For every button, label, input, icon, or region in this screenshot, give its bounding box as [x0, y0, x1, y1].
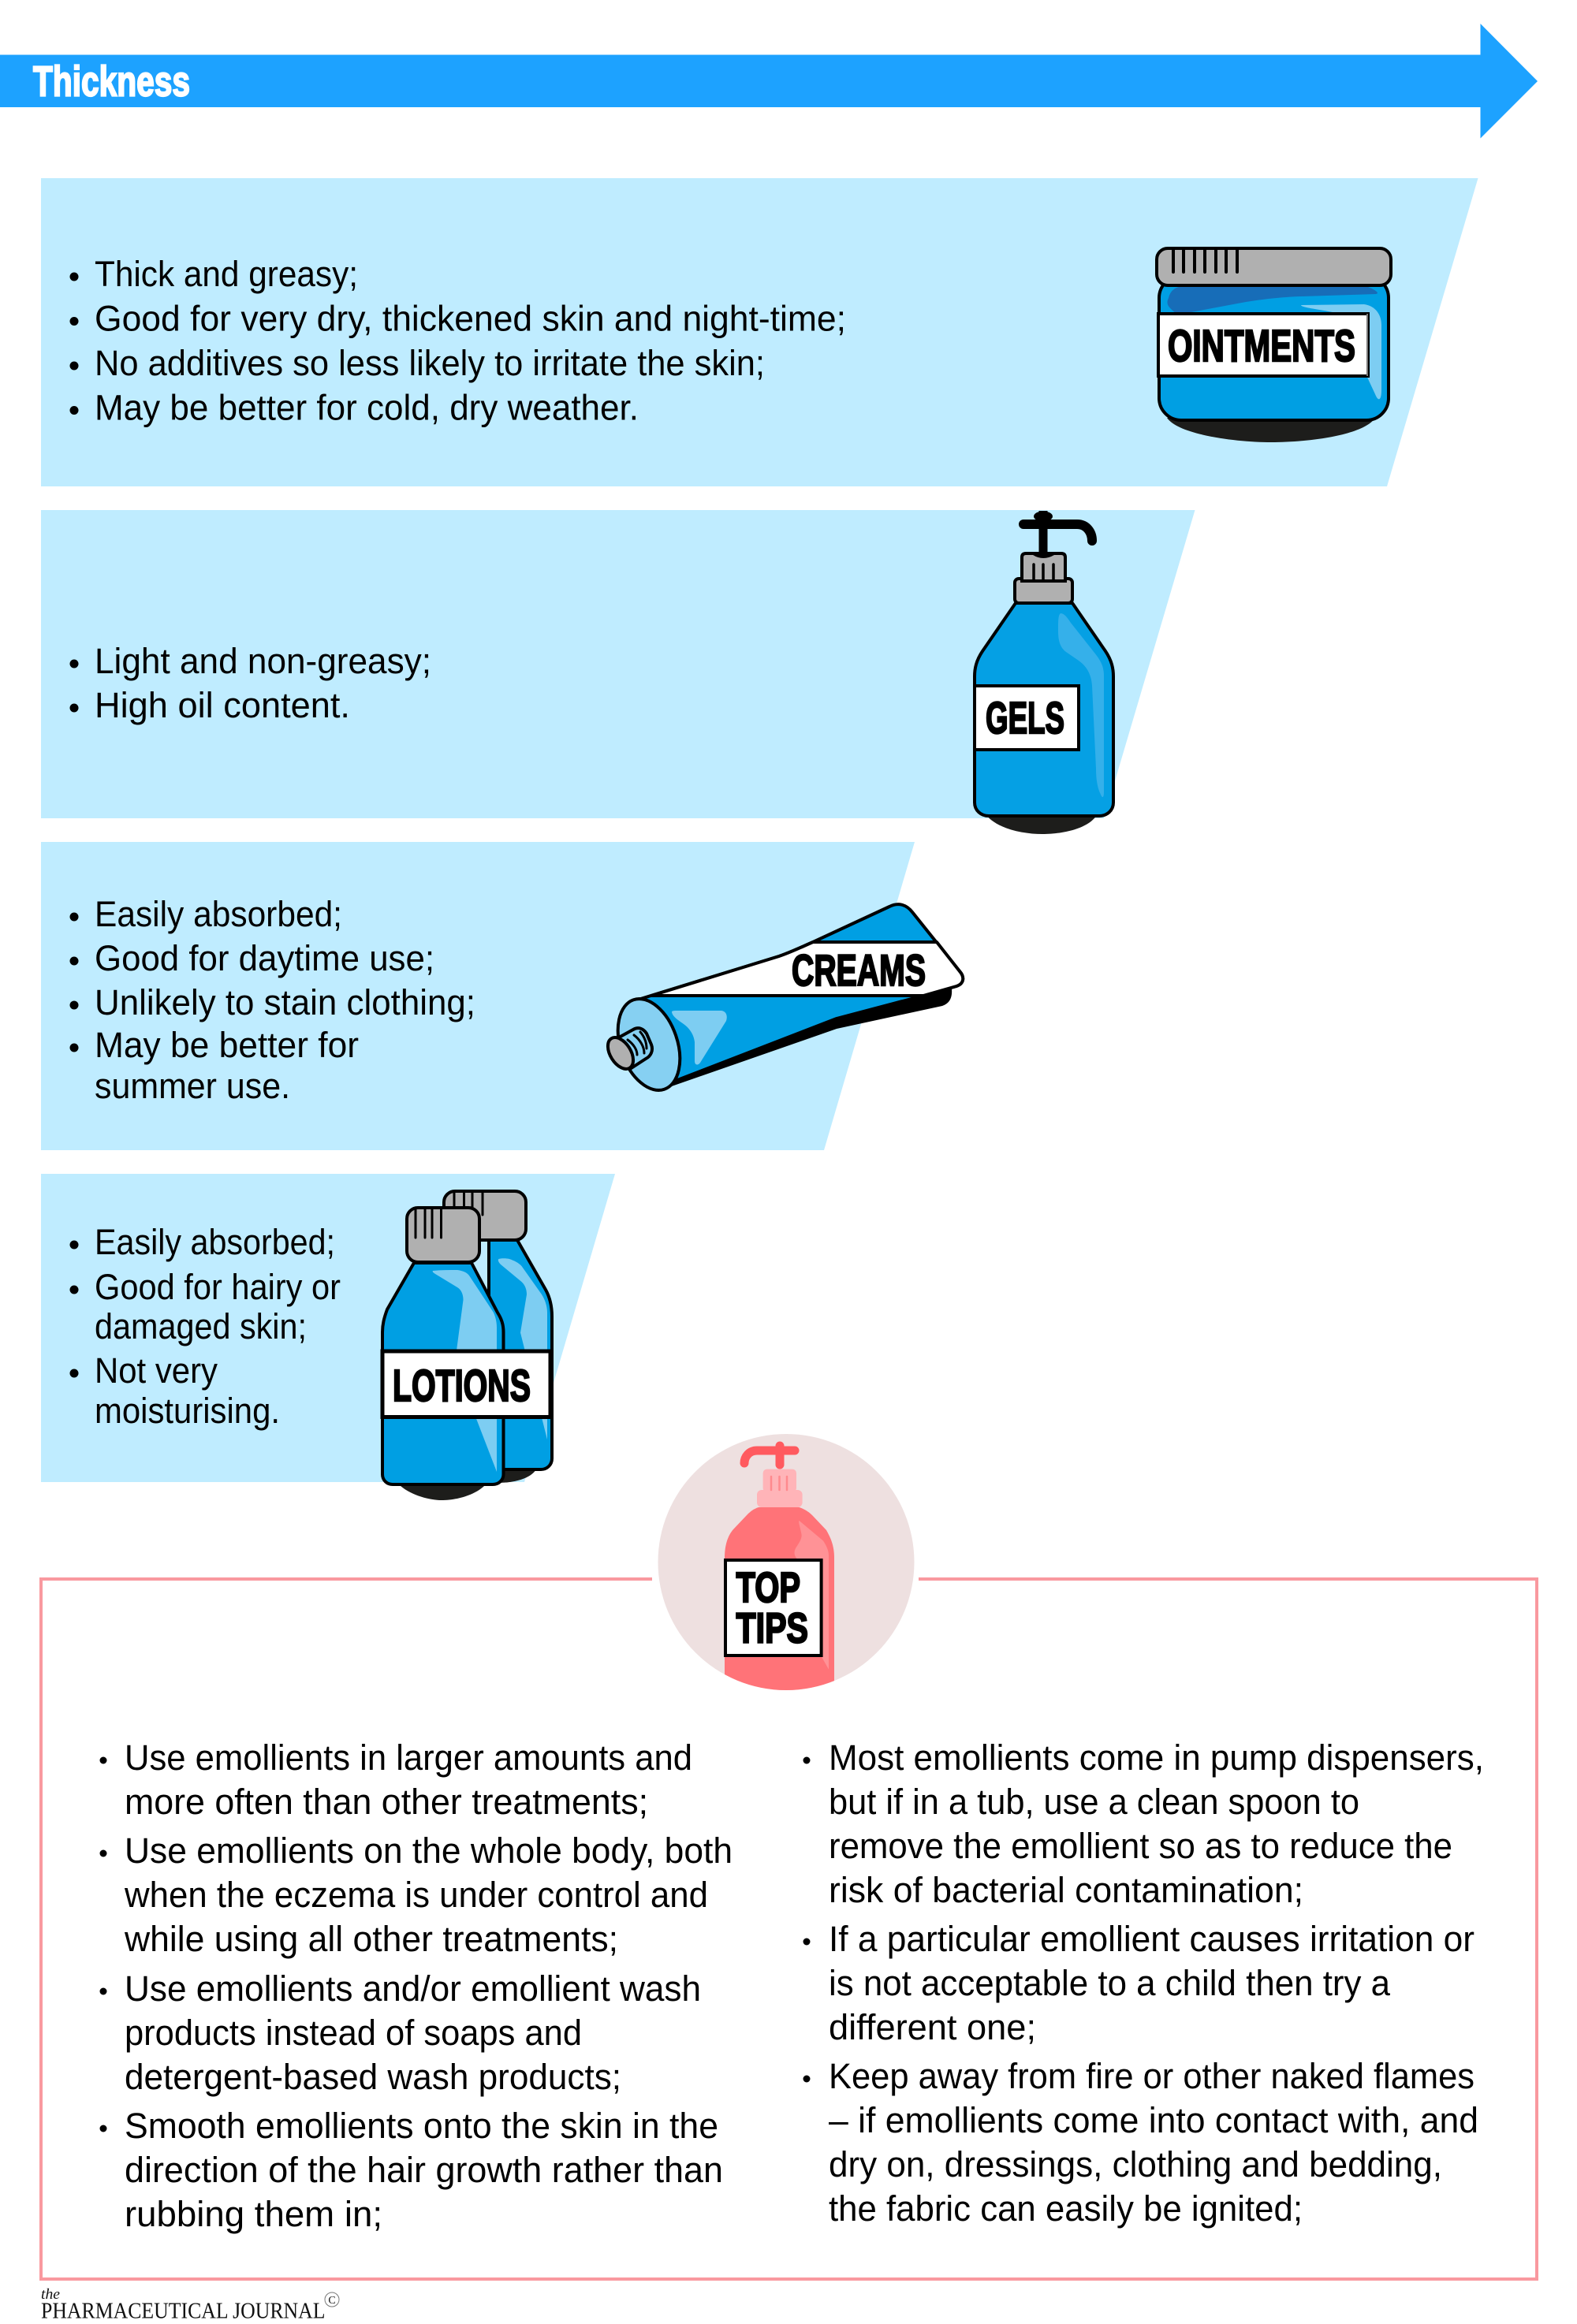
- creams bullet list: May be better for: [95, 1025, 359, 1065]
- badge label text: TOP: [736, 1564, 800, 1611]
- top tips right column: If a particular emollient causes irritation or: [829, 1919, 1474, 1959]
- gels bullet list: [69, 641, 431, 725]
- label text: OINTMENTS: [1168, 321, 1355, 371]
- top tips right column: dry on, dressings, clothing and bedding,: [829, 2144, 1442, 2184]
- top tips right column: different one;: [829, 2007, 1036, 2047]
- icon: ointment jar: [1157, 248, 1391, 442]
- icon: cream tube: [602, 904, 963, 1098]
- top tips right column: – if emollients come into contact with, and: [829, 2100, 1478, 2140]
- gels bullet list: Light and non-greasy;: [95, 641, 431, 681]
- icon: lotion bottles: [382, 1191, 552, 1500]
- creams bullet list: summer use.: [95, 1066, 290, 1106]
- lotions bullet list: Easily absorbed;: [95, 1222, 335, 1262]
- top tips left column: Use emollients and/or emollient wash: [125, 1968, 701, 2009]
- top tips right column: but if in a tub, use a clean spoon to: [829, 1782, 1359, 1822]
- thickness arrow: [0, 24, 1538, 139]
- creams bullet list: Unlikely to stain clothing;: [95, 982, 475, 1022]
- top tips left column: when the eczema is under control and: [124, 1875, 708, 1915]
- top tips right column: risk of bacterial contamination;: [829, 1870, 1303, 1910]
- label text: LOTIONS: [393, 1361, 531, 1411]
- lotions bullet list: damaged skin;: [95, 1306, 307, 1346]
- gels bullet list: High oil content.: [95, 685, 350, 725]
- creams bullet list: Easily absorbed;: [95, 894, 342, 934]
- icon: pump bottle red: [725, 1446, 834, 1703]
- top tips badge: [658, 1434, 915, 1703]
- top tips left column: Use emollients on the whole body, both: [125, 1831, 733, 1871]
- creams bullet list: Good for daytime use;: [95, 938, 434, 978]
- icon: pump bottle: [975, 511, 1113, 834]
- footer logo: PHARMACEUTICAL JOURNAL: [41, 2299, 325, 2324]
- top tips right column: [803, 1737, 1484, 2229]
- top tips left column: products instead of soaps and: [125, 2013, 582, 2053]
- creams bullet list: [69, 894, 475, 1106]
- ointments bullet list: No additives so less likely to irritate the skin;: [95, 343, 765, 383]
- badge label text: TIPS: [736, 1605, 808, 1652]
- footer logo: the: [41, 2286, 60, 2303]
- top tips left column: detergent-based wash products;: [125, 2057, 621, 2097]
- panel: ointments: [41, 178, 1478, 486]
- top tips left column: Use emollients in larger amounts and: [125, 1737, 692, 1778]
- top tips left column: Smooth emollients onto the skin in the: [125, 2106, 718, 2146]
- lotions bullet list: Good for hairy or: [95, 1267, 341, 1307]
- top tips frame: [41, 1579, 1537, 2279]
- lotions bullet list: [69, 1222, 341, 1431]
- badge label text: [736, 1564, 808, 1652]
- panel: lotions: [41, 1174, 615, 1500]
- top tips left column: [99, 1737, 733, 2234]
- label text: CREAMS: [792, 945, 926, 995]
- lotions bullet list: moisturising.: [95, 1391, 280, 1431]
- copyright mark: [325, 2292, 339, 2307]
- ointments bullet list: [69, 254, 846, 427]
- panel: creams: [41, 842, 963, 1150]
- top tips left column: more often than other treatments;: [125, 1782, 648, 1822]
- top tips right column: the fabric can easily be ignited;: [829, 2188, 1303, 2229]
- top tips right column: Most emollients come in pump dispensers,: [829, 1737, 1484, 1778]
- top tips left column: rubbing them in;: [125, 2194, 382, 2234]
- top tips left column: while using all other treatments;: [124, 1919, 618, 1959]
- panel: gels: [41, 510, 1195, 834]
- arrow heading: Thickness: [33, 58, 190, 106]
- footer logo: [41, 2286, 339, 2324]
- ointments bullet list: Thick and greasy;: [95, 254, 358, 294]
- lotions bullet list: Not very: [95, 1350, 218, 1391]
- copyright mark: C: [328, 2295, 336, 2307]
- panel: top tips: [41, 1434, 1537, 2279]
- label text: GELS: [986, 693, 1064, 743]
- top tips right column: Keep away from fire or other naked flames: [829, 2056, 1474, 2096]
- top tips right column: is not acceptable to a child then try a: [829, 1963, 1391, 2003]
- ointments bullet list: Good for very dry, thickened skin and night-time;: [95, 298, 846, 339]
- top tips left column: direction of the hair growth rather than: [125, 2150, 723, 2190]
- top tips right column: remove the emollient so as to reduce the: [829, 1826, 1452, 1866]
- ointments bullet list: May be better for cold, dry weather.: [95, 388, 639, 427]
